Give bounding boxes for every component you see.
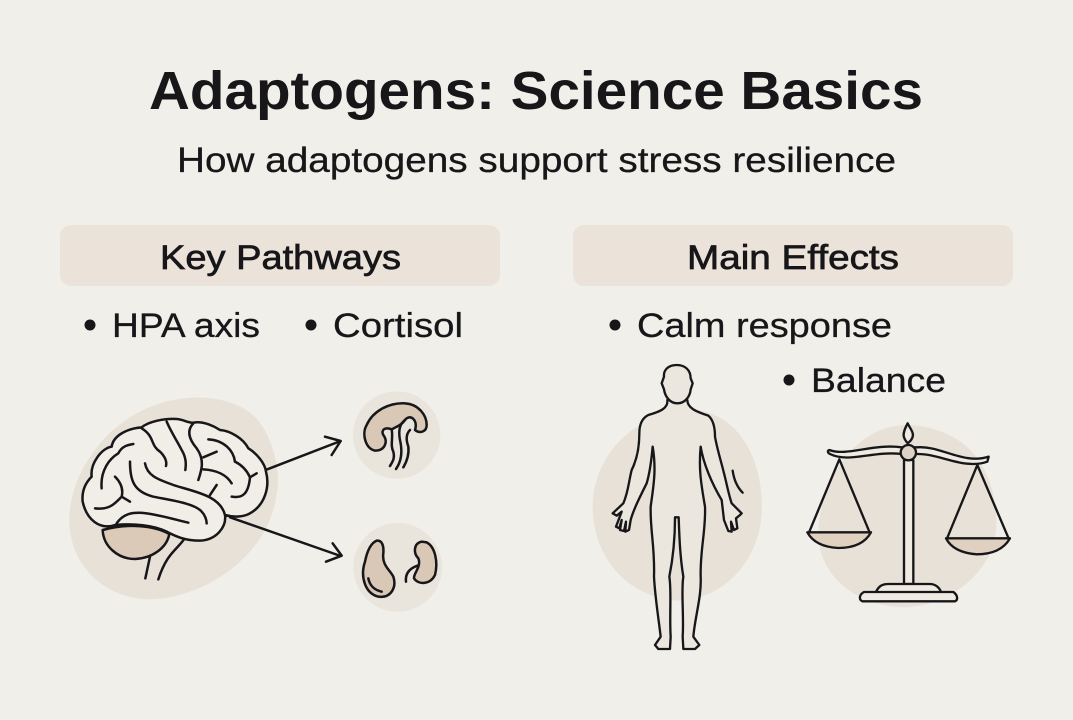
panel: key pathways heading: Key Pathways (160, 239, 401, 277)
background circle: adrenal (353, 391, 440, 479)
arrow: brain to kidneys (230, 517, 342, 562)
bullet: HPA axis: HPA axis (112, 307, 260, 345)
subtitle: How adaptogens support stress resilience (177, 141, 896, 180)
background blob: scale (818, 425, 996, 607)
icon: adrenal gland (364, 403, 427, 469)
bullet: Calm response: Calm response (637, 307, 892, 345)
background blob: body (593, 410, 762, 601)
bullet: Cortisol: Cortisol (333, 307, 463, 345)
panel: main effects heading (573, 225, 1013, 286)
panel: key pathways heading (60, 225, 500, 286)
bullet: Balance: Balance (811, 362, 946, 400)
icon: brain (82, 419, 267, 579)
pathways illustration (69, 391, 442, 612)
background blob: brain (69, 398, 278, 599)
background circle: kidneys (353, 523, 442, 612)
balance scale illustration (807, 423, 1010, 607)
arrow: brain to adrenal (267, 437, 341, 469)
human body illustration (593, 365, 762, 649)
icon: human silhouette (613, 365, 743, 649)
icon: balance scale (807, 423, 1010, 601)
panel: main effects heading: Main Effects (687, 239, 899, 277)
icon: kidneys (363, 541, 436, 597)
title: Adaptogens: Science Basics (149, 61, 923, 121)
